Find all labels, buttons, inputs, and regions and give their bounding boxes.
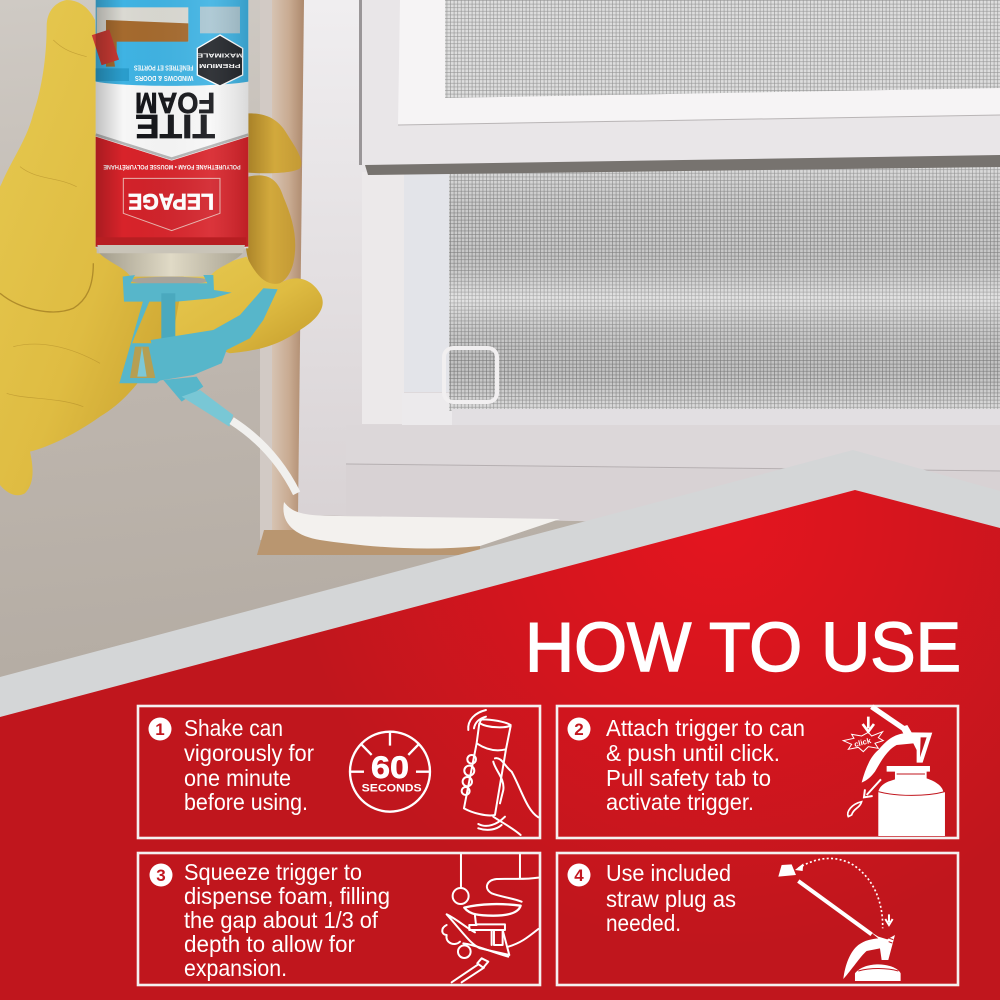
step 1 text: one minute bbox=[184, 765, 291, 791]
photo: foam in the gap bbox=[283, 502, 560, 548]
glove palm and thumb bbox=[0, 0, 187, 495]
screen pull tab bbox=[444, 348, 497, 402]
icon: 60 seconds timer: SECONDS bbox=[362, 783, 422, 795]
icon: hand shaking can bbox=[462, 710, 538, 835]
straw bbox=[232, 421, 297, 493]
panel: step 3 bbox=[138, 853, 540, 985]
step 3 text: dispense foam, filling bbox=[184, 883, 390, 909]
step 3 text: depth to allow for bbox=[184, 931, 355, 957]
step 1 text: Shake can bbox=[184, 715, 283, 741]
step 2 text: Pull safety tab to bbox=[606, 765, 771, 791]
step 3 number bbox=[150, 864, 172, 886]
photo: hand holding can bbox=[0, 0, 323, 495]
LePage badge bbox=[123, 178, 220, 231]
weather seal bbox=[365, 155, 1000, 175]
icon: 60 seconds timer: 60 bbox=[371, 750, 409, 785]
step 3 text: the gap about 1/3 of bbox=[184, 907, 379, 933]
step 2 number: 2 bbox=[574, 720, 584, 739]
step 1 text: before using. bbox=[184, 789, 308, 815]
upper sash bbox=[359, 0, 1000, 165]
panel: step 4 bbox=[557, 853, 958, 985]
can label texts, printed upside down: PREMIUM bbox=[198, 62, 241, 68]
step 4 text: straw plug as bbox=[606, 886, 736, 912]
icon: 60 seconds timer bbox=[350, 732, 430, 812]
aerosol can: FOAM bbox=[135, 86, 215, 118]
step 1 number: 1 bbox=[155, 720, 165, 739]
grey diagonal band bbox=[0, 450, 1000, 1000]
step 4 number: 4 bbox=[574, 866, 584, 885]
panel: step 1 bbox=[138, 706, 540, 838]
step 1 text: vigorously for bbox=[184, 740, 314, 766]
step 3 text: Squeeze trigger to bbox=[184, 859, 362, 885]
step 4 text: needed. bbox=[606, 910, 681, 936]
lower rail bbox=[346, 409, 1000, 530]
icon: attach trigger to can: click bbox=[853, 736, 873, 749]
step 4 text bbox=[606, 860, 736, 936]
step 2 text: Attach trigger to can bbox=[606, 715, 805, 741]
can label texts, printed upside down: MAXIMALE bbox=[197, 51, 243, 57]
can label texts, printed upside down bbox=[134, 51, 243, 83]
can label texts, printed upside down: FENÊTRES ET PORTES bbox=[134, 63, 193, 72]
step 2 number bbox=[568, 718, 590, 740]
icon: attach trigger to can bbox=[843, 707, 945, 836]
photo: wall background bbox=[0, 0, 1000, 720]
step 3 number: 3 bbox=[156, 866, 166, 885]
aerosol can: POLYURETHANE FOAM • MOUSSE POLYURÉTHANE bbox=[103, 163, 241, 172]
foam trigger bbox=[119, 275, 278, 427]
step 2 text bbox=[606, 715, 805, 815]
title: HOW TO USE bbox=[525, 608, 961, 686]
glove seam and creases bbox=[0, 40, 100, 407]
photo: drywall edge and wood stud bbox=[257, 0, 480, 555]
lower screen bbox=[449, 160, 1000, 411]
can label texts, printed upside down: WINDOWS & DOORS bbox=[135, 74, 193, 83]
step 1 number bbox=[148, 718, 172, 740]
LePage badge: LEPAGE bbox=[128, 189, 214, 214]
step 4 text: Use included bbox=[606, 860, 731, 886]
panel: step 2 bbox=[557, 706, 958, 838]
lower jamb bbox=[362, 172, 452, 425]
step 2 text: & push until click. bbox=[606, 740, 780, 766]
red panel bbox=[0, 490, 1000, 1000]
aerosol can: TITE bbox=[135, 107, 215, 144]
icon: squeezing trigger bbox=[442, 854, 538, 982]
outer window frame bbox=[298, 0, 1000, 530]
step 3 text bbox=[184, 859, 390, 981]
photo: window bbox=[298, 0, 1000, 530]
step 4 number bbox=[568, 864, 590, 886]
step 2 text: activate trigger. bbox=[606, 789, 754, 815]
aerosol can bbox=[92, 0, 248, 285]
icon: straw plug bbox=[778, 858, 901, 981]
step 3 text: expansion. bbox=[184, 955, 287, 981]
step 1 text bbox=[184, 715, 314, 815]
glove back fingers bbox=[167, 113, 323, 353]
